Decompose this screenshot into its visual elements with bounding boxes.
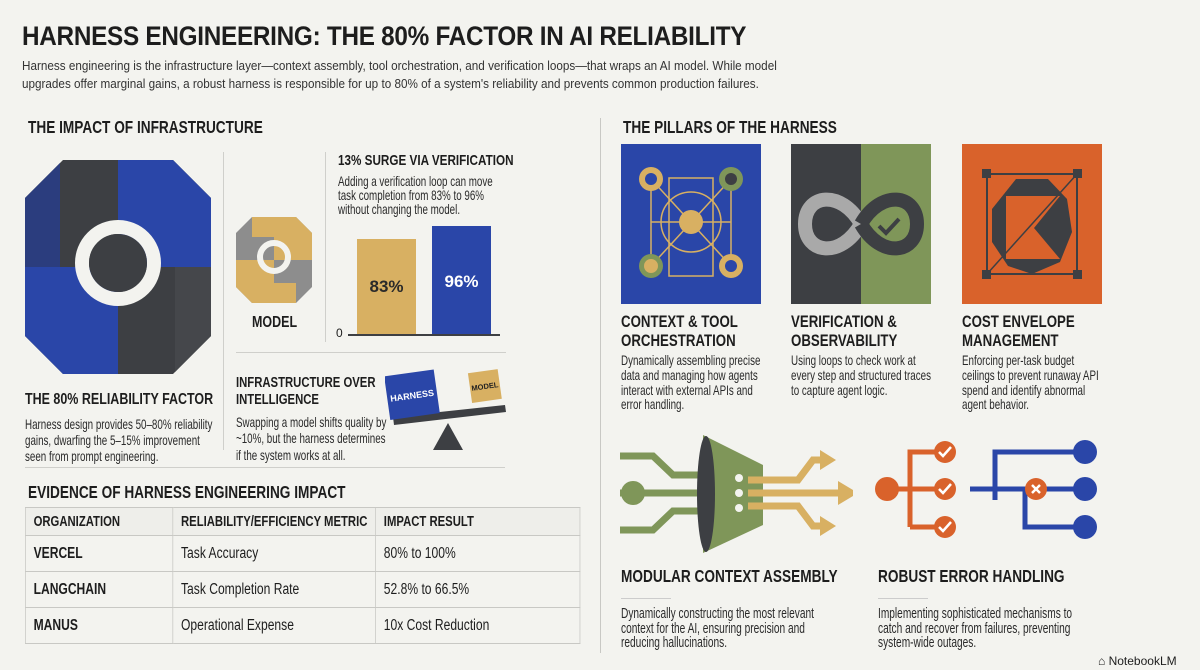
icon: model octagon xyxy=(236,217,312,303)
table xyxy=(25,507,580,644)
icon: orchestration network xyxy=(621,144,761,304)
logo: NotebookLM: ⌂ NotebookLM xyxy=(1098,654,1177,668)
table: Task Completion Rate xyxy=(181,580,299,598)
panel: verification & observability: VERIFICATION & xyxy=(791,312,897,331)
text block: infrastructure over intelligence: Swapping a model shifts quality by ~10%, but the harness determines if the system works at all. xyxy=(236,414,386,463)
panel: verification & observability: OBSERVABILITY xyxy=(791,331,897,350)
table: 52.8% to 66.5% xyxy=(384,580,469,598)
text block: 80% reliability: THE 80% RELIABILITY FACTOR xyxy=(25,391,213,408)
section heading: impact: THE IMPACT OF INFRASTRUCTURE xyxy=(28,117,263,137)
icon: harness octagon xyxy=(25,160,211,374)
section heading: evidence: EVIDENCE OF HARNESS ENGINEERING IMPACT xyxy=(28,482,346,502)
table: VERCEL xyxy=(34,544,83,562)
text block: infrastructure over intelligence xyxy=(236,375,386,463)
bar chart xyxy=(336,226,500,340)
panel: context & tool orchestration: ORCHESTRATION xyxy=(621,331,736,350)
panel: context & tool orchestration: Dynamically assembling precise data and managing how agents interact with external APIs and error handling. xyxy=(621,352,760,412)
text block: infrastructure over intelligence: INFRASTRUCTURE OVER xyxy=(236,375,375,391)
text block: robust error handling xyxy=(878,566,1072,651)
table: RELIABILITY/EFFICIENCY METRIC xyxy=(181,514,367,530)
table: ORGANIZATION xyxy=(34,514,120,530)
table: Operational Expense xyxy=(181,616,294,634)
table: Task Accuracy xyxy=(181,544,258,562)
panel: context & tool orchestration xyxy=(621,144,761,412)
panel: cost envelope management: Enforcing per-task budget ceilings to prevent runaway API spend and identify abnormal agent behavior. xyxy=(962,352,1099,412)
panel: context & tool orchestration: CONTEXT & TOOL xyxy=(621,312,738,331)
text block: 80% reliability xyxy=(25,391,213,464)
text block: robust error handling: Implementing sophisticated mechanisms to catch and recover from failures, preventing system-wide outages. xyxy=(878,606,1072,651)
section heading: pillars: THE PILLARS OF THE HARNESS xyxy=(623,117,837,137)
table: MANUS xyxy=(34,616,78,634)
table: 10x Cost Reduction xyxy=(384,616,489,634)
bar chart: 96% xyxy=(444,272,479,291)
panel: verification & observability: Using loops to check work at every step and structured traces to capture agent logic. xyxy=(791,352,931,398)
icon: seesaw: MODEL xyxy=(471,380,499,393)
icon: seesaw xyxy=(385,369,506,450)
text block: modular context assembly xyxy=(621,566,838,651)
icon: envelope boundary xyxy=(962,144,1102,304)
bar chart: 83% xyxy=(369,277,404,296)
text block: robust error handling: ROBUST ERROR HANDLING xyxy=(878,566,1065,586)
label: model: MODEL xyxy=(252,314,297,331)
text block: 80% reliability: Harness design provides 50–80% reliability gains, dwarfing the 5–15% improvement seen from prompt engineering. xyxy=(25,416,212,464)
icon: error handling tree xyxy=(875,440,1097,539)
subtitle: Harness engineering is the infrastructure layer—context assembly, tool orchestration, and verification loops—that wraps an AI model. While model upgrades offer marginal gains, a robust harness is responsible for up to 80% of a system's reliability and prevents common production failures. xyxy=(22,58,777,91)
icon: funnel with arrows xyxy=(620,435,853,553)
panel: cost envelope management: MANAGEMENT xyxy=(962,331,1059,350)
panel: cost envelope management xyxy=(962,144,1102,412)
panel: verification & observability xyxy=(791,144,931,398)
table: LANGCHAIN xyxy=(34,580,106,598)
icon: seesaw: HARNESS xyxy=(390,388,435,404)
title: HARNESS ENGINEERING: THE 80% FACTOR IN AI RELIABILITY xyxy=(22,21,746,51)
text block: modular context assembly: Dynamically constructing the most relevant context for the AI, ensuring precision and reducing hallucinations. xyxy=(621,606,814,651)
panel: cost envelope management: COST ENVELOPE xyxy=(962,312,1075,331)
text block: 13% surge xyxy=(338,152,514,217)
table: 80% to 100% xyxy=(384,544,456,562)
icon: infinity loop xyxy=(791,144,931,304)
table: IMPACT RESULT xyxy=(384,514,474,530)
bar chart: 0 xyxy=(336,326,343,340)
text block: infrastructure over intelligence: INTELLIGENCE xyxy=(236,392,319,408)
text block: 13% surge: 13% SURGE VIA VERIFICATION xyxy=(338,152,514,169)
text block: modular context assembly: MODULAR CONTEXT ASSEMBLY xyxy=(621,566,838,586)
text block: 13% surge: Adding a verification loop can move task completion from 83% to 96% without changing the model. xyxy=(338,172,493,216)
